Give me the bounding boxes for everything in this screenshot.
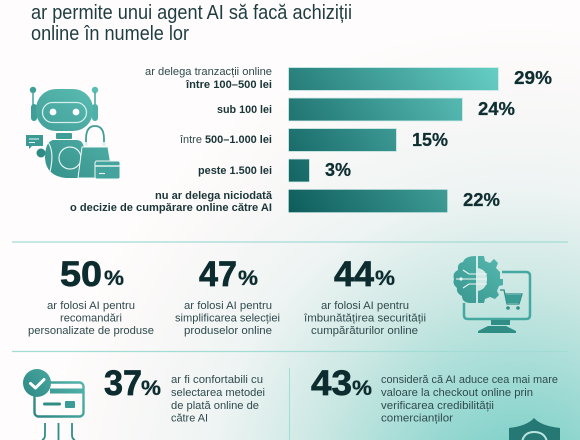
bar row: 29% [145,66,552,91]
bar row: 15%: 15% [412,130,448,150]
stat: 43%: % [352,377,372,400]
bar row: 22%: o decizie de cumpărare online către AI [70,202,272,214]
stat: 50%: personalizate de produse [28,325,154,337]
bar row: 24%: 24% [478,99,515,119]
stat: 47% [175,255,280,337]
gear half [478,256,503,303]
stat: 47%: 47 [199,255,237,294]
bar row: 29%: 29% [514,68,552,88]
stat: 44%: îmbunătățirea securității [303,312,426,324]
stat: 50%: ar folosi AI pentru [47,300,135,312]
bar row: 3% [198,159,351,182]
stat: 43%: comercianților [381,412,453,424]
bar row: 15%: între 500–1.000 lei [179,134,272,146]
stat: 47%: produselor online [184,325,272,337]
stat: 43%: consideră că AI aduce cea mai mare [381,374,558,386]
bar row: 15% [179,128,448,152]
stat: 50%: 50 [60,255,102,294]
stat: 43%: verificarea credibilității [381,400,494,412]
stat: 37%: % [141,377,161,400]
stat: 44% [303,255,426,337]
stat: 37%: către AI [171,412,208,424]
stat: 44%: cumpărăturilor online [311,325,418,337]
stat: 37%: 37 [104,364,142,403]
bar row: 3%: 3% [325,160,351,180]
stat: 43%: valoare la checkout online prin [381,387,533,399]
stat: 37%: de plată online de [171,400,259,412]
title [31,1,352,45]
bar row: 29%: ar delega tranzacții online [145,66,272,78]
bar row: 22%: nu ar delega niciodată [155,190,273,202]
stat: 43% [311,364,558,424]
icon: payment card with check [23,369,84,440]
stat: 37%: ar fi confortabili cu [171,374,263,386]
icon: shield [509,418,560,440]
stat: 44%: ar folosi AI pentru [321,300,409,312]
bar row: 29%: între 100–500 lei [185,79,272,91]
title: ar permite unui agent AI să facă achiziții [31,1,352,24]
bar row: 24%: sub 100 lei [217,104,272,116]
stat: 37%: selectarea metodei [171,387,265,399]
icon: robot with shopping bag [26,87,120,179]
icon: AI gear monitor with cart [453,256,530,333]
stat: 50%: recomandări [60,312,122,324]
bar row: 22% [70,190,500,214]
stat: 44%: 44 [334,255,375,294]
bar row: 24% [217,98,515,121]
bar chart [70,66,552,214]
stat: 50%: % [104,267,124,290]
stat: 44%: % [375,267,395,290]
bar row: 22%: 22% [463,190,500,210]
stat: 43%: 43 [311,364,352,403]
stat: 47%: ar folosi AI pentru [184,300,272,312]
stat: 47%: simplificarea selecției [175,312,280,324]
stat: 50% [28,255,154,337]
bar row: 3%: peste 1.500 lei [198,165,272,177]
title: online în numele lor [31,22,189,45]
stat: 47%: % [238,267,258,290]
brain half [453,256,476,303]
stat: 37% [104,364,265,424]
